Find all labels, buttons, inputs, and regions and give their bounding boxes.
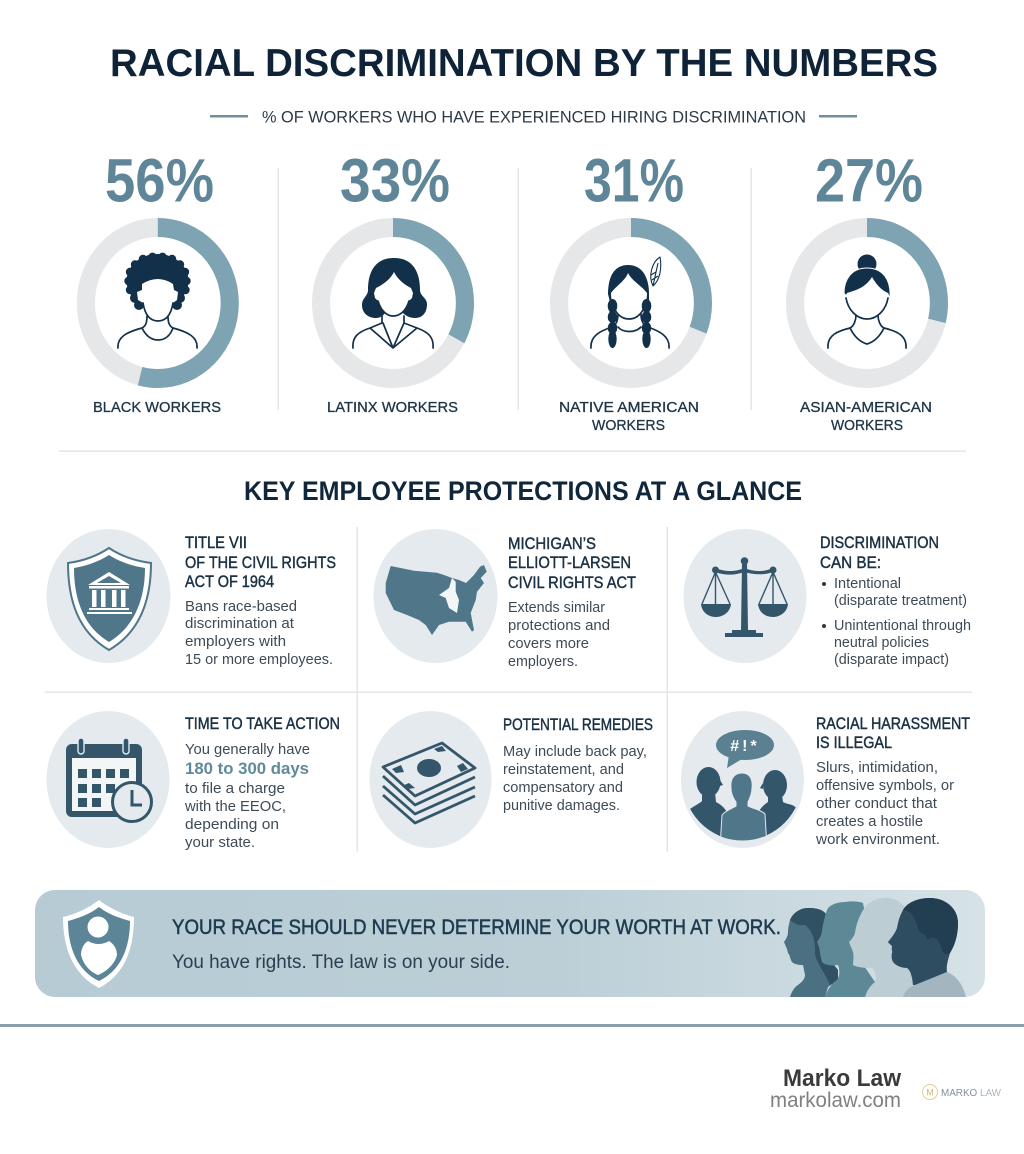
label	[800, 399, 932, 434]
section heading: KEY EMPLOYEE PROTECTIONS AT A GLANCE	[244, 476, 802, 506]
text block: DISCRIMINATION	[820, 534, 939, 552]
label: NATIVE AMERICAN	[559, 399, 699, 416]
text block: ACT OF 1964	[185, 573, 274, 591]
text block: You generally have	[185, 741, 310, 758]
subtitle with rules: % OF WORKERS WHO HAVE EXPERIENCED HIRING DISCRIMINATION	[262, 108, 806, 126]
text block: your state.	[185, 834, 255, 851]
text block	[185, 534, 336, 668]
illustration: silhouettes of four profiles	[784, 898, 966, 997]
text block: discrimination at	[185, 615, 295, 632]
text block: offensive symbols, or	[816, 777, 954, 794]
text block: Intentional	[834, 575, 901, 592]
panel: Elliott-Larsen	[374, 529, 636, 670]
stat: Black workers 56%	[86, 146, 230, 416]
text block: compensatory and	[503, 779, 623, 796]
text block: ELLIOTT-LARSEN	[508, 554, 631, 572]
stat: Asian-American workers 27%	[795, 146, 939, 434]
text block: CIVIL RIGHTS ACT	[508, 574, 636, 592]
text block: 15 or more employees.	[185, 651, 333, 668]
footer branding: markolaw.com	[770, 1089, 901, 1112]
footer rule	[0, 1024, 1024, 1027]
donut chart 31%	[559, 228, 703, 378]
icon: shield with person	[63, 900, 134, 988]
icon: person with hair bun	[828, 254, 906, 348]
title: RACIAL DISCRIMINATION BY THE NUMBERS	[110, 42, 938, 85]
text block: TITLE VII	[185, 534, 247, 552]
text block: neutral policies	[834, 634, 929, 651]
panel: Racial harassment	[681, 711, 970, 848]
panel: Title VII	[46, 529, 336, 668]
panel: Discrimination can be	[684, 529, 971, 668]
icon: calendar with clock	[46, 711, 170, 848]
text block: reinstatement, and	[503, 761, 624, 778]
text block: creates a hostile	[816, 813, 923, 830]
icon: three people with speech bubble	[681, 711, 804, 848]
label: BLACK WORKERS	[93, 399, 221, 416]
banner text	[172, 916, 781, 973]
text block: depending on	[185, 816, 279, 833]
stat: Native American workers 31%: 31%	[584, 146, 684, 214]
logo: M	[926, 1088, 934, 1098]
text block: May include back pay,	[503, 743, 647, 760]
text block: protections and	[508, 617, 610, 634]
text block: work environment.	[815, 831, 940, 848]
text block: Bans race-based	[185, 598, 297, 615]
text block: to file a charge	[185, 780, 285, 797]
icon: shield with courthouse	[46, 529, 170, 663]
text block: (disparate treatment)	[834, 592, 967, 609]
text block	[815, 715, 970, 848]
text block: Slurs, intimidation,	[816, 759, 938, 776]
logo	[922, 1084, 1002, 1100]
text block: Unintentional through	[834, 617, 971, 634]
text block: POTENTIAL REMEDIES	[503, 716, 653, 734]
stat: Latinx workers 33%: 33%	[340, 146, 450, 214]
panel: Potential remedies	[370, 711, 653, 848]
icon: person with wavy bob	[353, 258, 433, 348]
text block: CAN BE:	[820, 554, 881, 572]
label: WORKERS	[831, 417, 903, 434]
donut chart 33%	[321, 228, 465, 378]
footer branding	[770, 1065, 1002, 1112]
label	[559, 399, 699, 434]
icon: stack of money	[370, 711, 492, 848]
icon: scales of justice	[684, 529, 806, 663]
text block: IS ILLEGAL	[816, 734, 892, 752]
banner text: YOUR RACE SHOULD NEVER DETERMINE YOUR WORTH AT WORK.	[172, 916, 781, 939]
banner text: You have rights. The law is on your side.	[172, 952, 510, 973]
logo: MARKO LAW	[941, 1088, 1002, 1099]
text block: employers.	[508, 653, 578, 670]
text block: employers with	[185, 633, 286, 650]
icon: US map	[374, 529, 498, 663]
text block: TIME TO TAKE ACTION	[185, 715, 340, 733]
donut chart 27%	[795, 228, 939, 378]
text block	[184, 715, 340, 851]
label: LATINX WORKERS	[327, 399, 458, 416]
text block	[503, 716, 653, 814]
donut chart 56%	[86, 228, 230, 378]
text block: RACIAL HARASSMENT	[816, 715, 970, 733]
panel: Time to take action	[46, 711, 340, 851]
text block	[508, 535, 636, 670]
text block: 180 to 300 days	[185, 759, 309, 778]
text block: covers more	[508, 635, 589, 652]
label: ASIAN-AMERICAN	[800, 399, 932, 416]
text block: OF THE CIVIL RIGHTS	[185, 554, 336, 572]
text block: (disparate impact)	[834, 651, 949, 668]
stat: Native American workers 31%	[559, 146, 703, 434]
icon: person with braids and feather	[591, 257, 669, 348]
stat: Asian-American workers 27%: 27%	[815, 146, 923, 214]
text block	[820, 534, 971, 668]
text block: punitive damages.	[503, 797, 620, 814]
text block: with the EEOC,	[184, 798, 286, 815]
text block: MICHIGAN’S	[508, 535, 596, 553]
banner	[35, 890, 985, 997]
label: WORKERS	[592, 417, 665, 434]
text block: other conduct that	[816, 795, 938, 812]
stat: Black workers 56%: 56%	[105, 146, 214, 214]
icon: three people with speech bubble: #!*	[730, 738, 760, 755]
stat: Latinx workers 33%	[321, 146, 465, 416]
icon: person with afro	[118, 253, 197, 348]
text block: Extends similar	[508, 599, 605, 616]
footer branding: Marko Law	[783, 1065, 901, 1092]
